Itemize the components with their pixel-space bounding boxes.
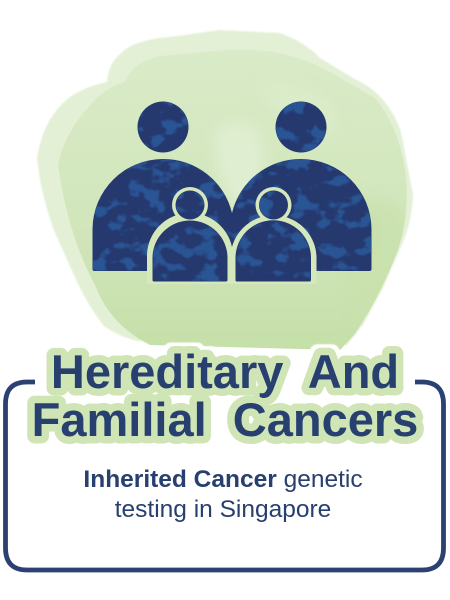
subtitle text: Inherited Cancer genetic — [83, 466, 363, 493]
icon: parents — [90, 100, 375, 275]
icon: children — [147, 187, 316, 284]
watercolor blob background — [37, 30, 415, 355]
icon: family of four — [90, 100, 375, 284]
title: Familial Cancers — [32, 393, 418, 446]
subtitle text: testing in Singapore — [115, 496, 331, 523]
title: Hereditary And — [51, 345, 399, 398]
panel: rounded outline box — [6, 382, 444, 570]
